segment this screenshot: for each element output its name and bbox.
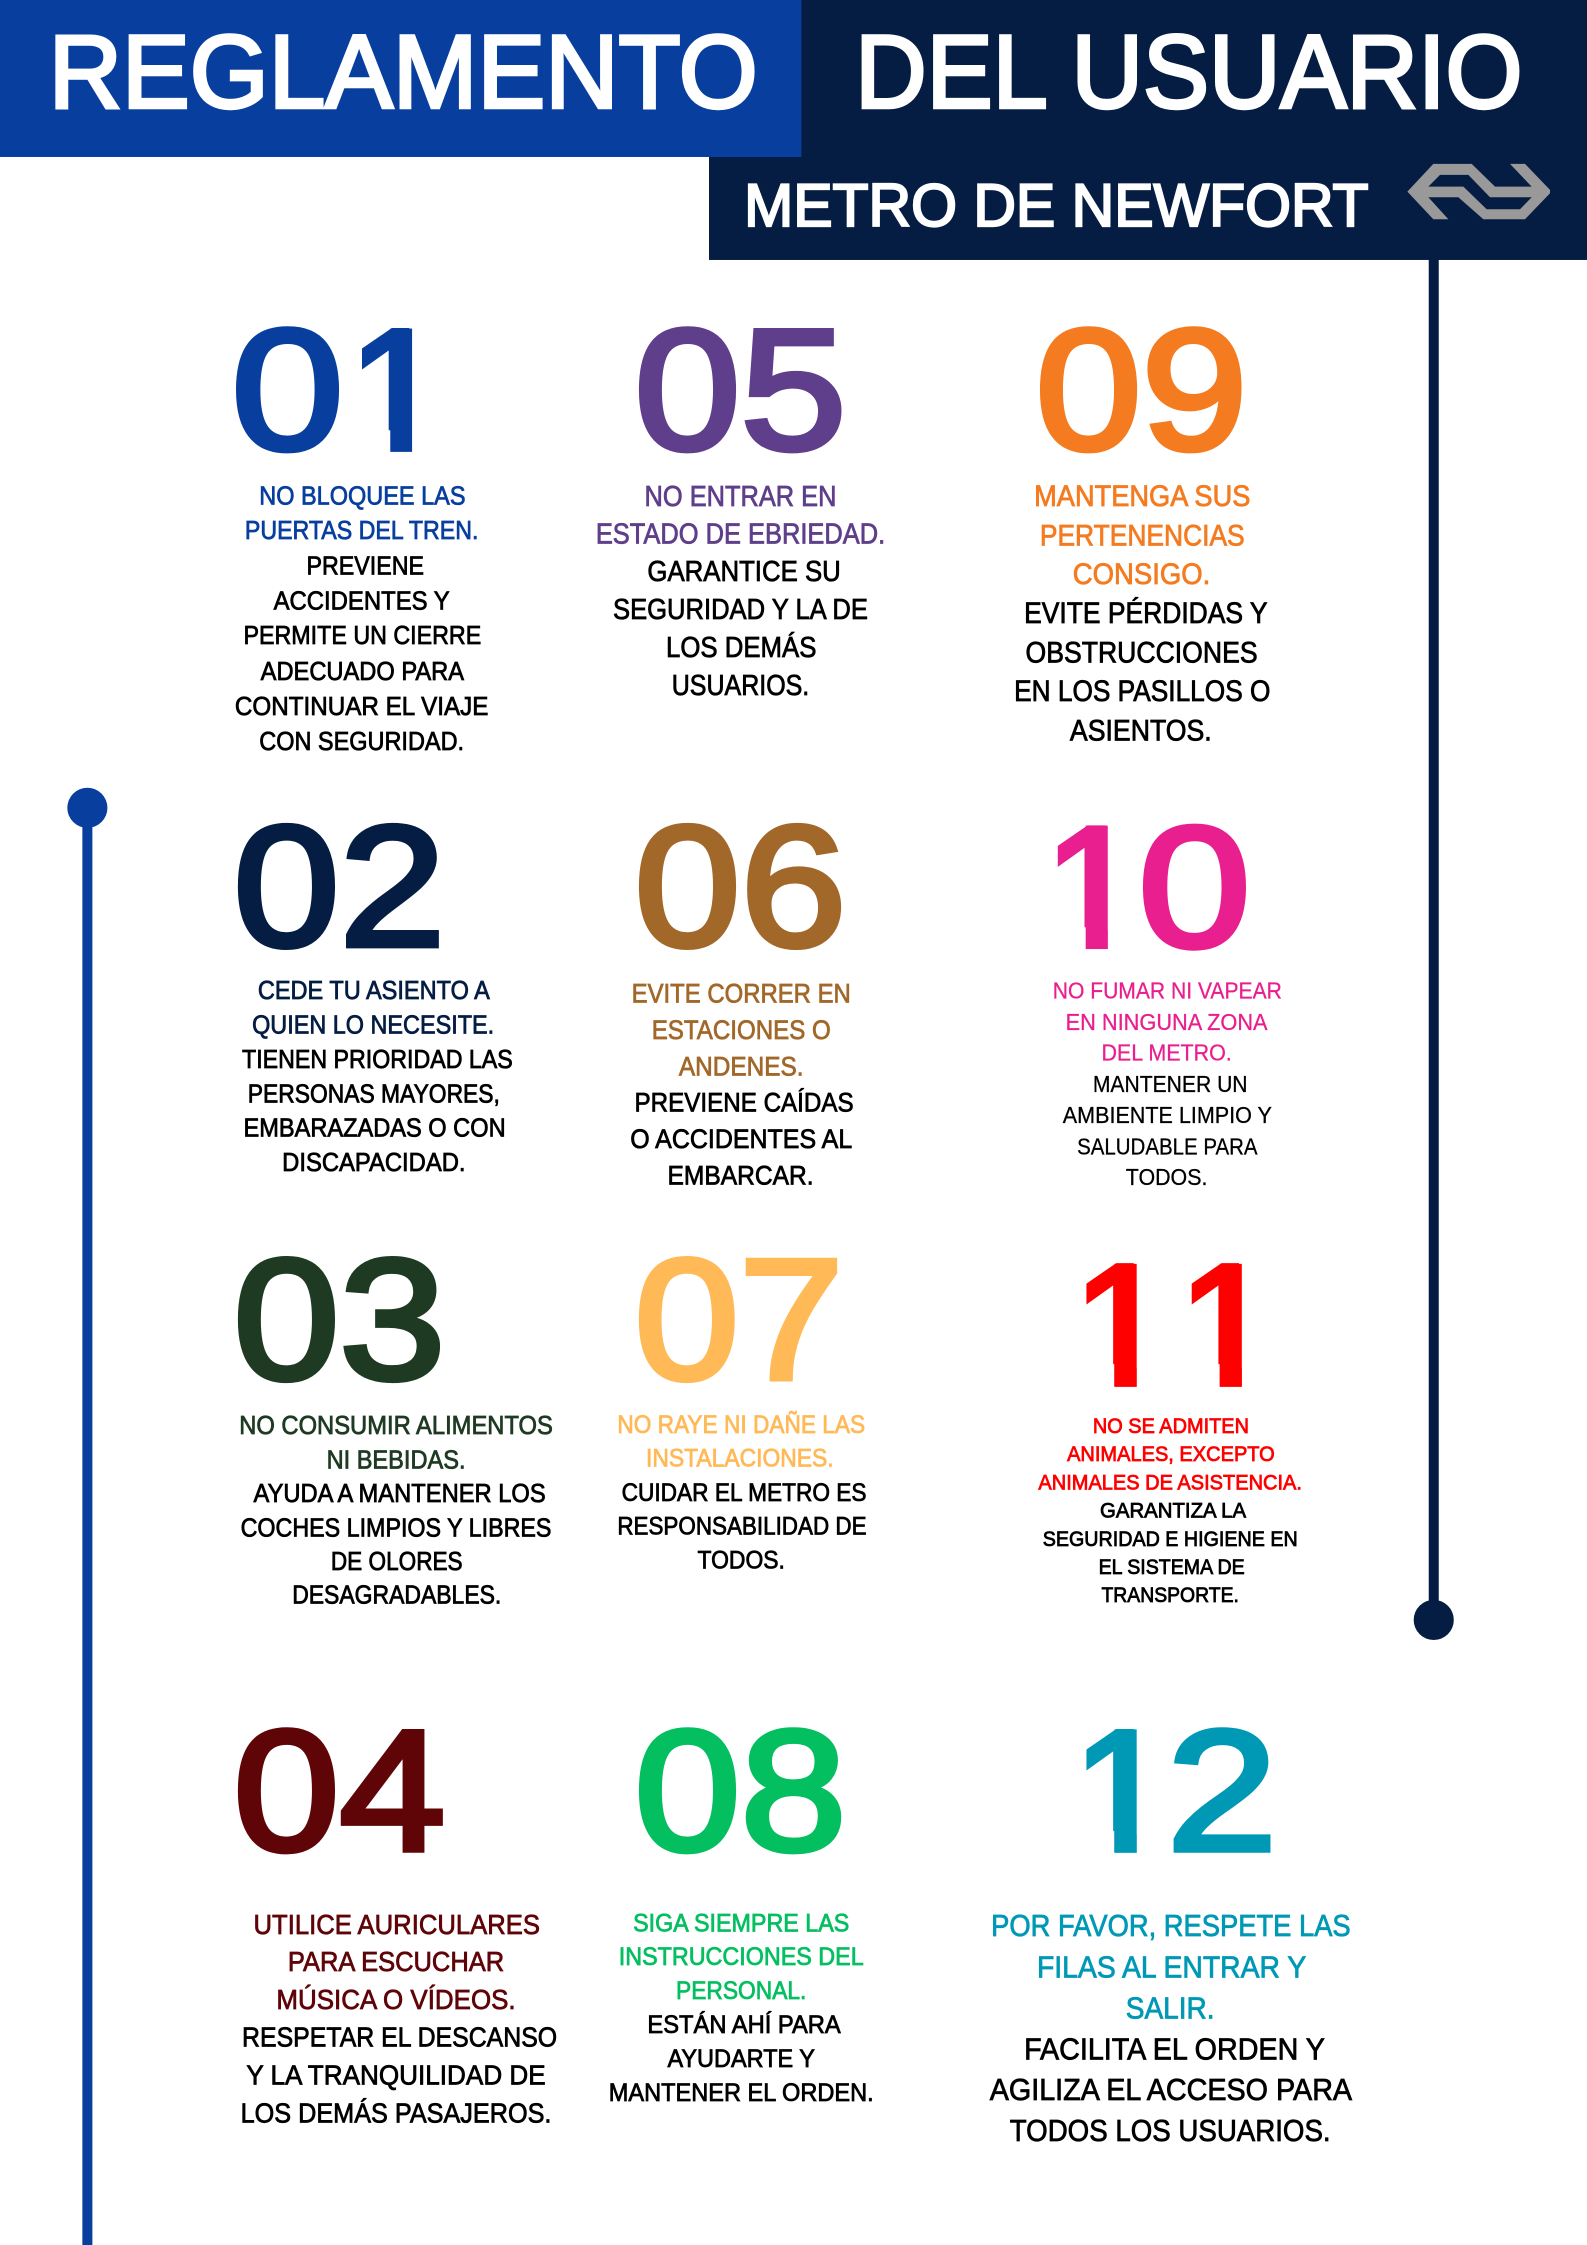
number 05: 05	[635, 294, 846, 486]
rule 06	[630, 791, 854, 1190]
rule 01 text: CON SEGURIDAD.	[259, 726, 464, 756]
rule 04 text: UTILICE AURICULARES	[254, 1908, 540, 1940]
rule 08 text: PERSONAL.	[676, 1977, 806, 2005]
rule 11	[1038, 1229, 1302, 1607]
number 10	[1038, 791, 1251, 983]
number 12	[1067, 1695, 1277, 1887]
rule 03 text: NI BEBIDAS.	[327, 1446, 466, 1474]
rule 02	[233, 791, 513, 1177]
rule 01 text: ADECUADO PARA	[261, 656, 465, 686]
rule 10 text: AMBIENTE LIMPIO Y	[1063, 1102, 1272, 1128]
rule 08 text	[609, 1909, 874, 2107]
rule 01 text: NO BLOQUEE LAS	[259, 481, 466, 511]
number 06: 06	[635, 791, 846, 983]
rule 12 text	[990, 1908, 1353, 2148]
rule 10 text	[1053, 977, 1282, 1190]
rule 01	[231, 294, 488, 756]
rule 08 text: INSTRUCCIONES DEL	[619, 1943, 864, 1971]
number 10: 1	[1044, 791, 1140, 983]
rule 12 text: POR FAVOR, RESPETE LAS	[991, 1908, 1351, 1943]
header	[0, 0, 1587, 260]
rule 07 text: NO RAYE NI DAÑE LAS	[617, 1410, 865, 1439]
rule 12 text: FACILITA EL ORDEN Y	[1024, 2031, 1325, 2066]
rule 07 text: CUIDAR EL METRO ES	[622, 1479, 867, 1507]
rule 12 text: TODOS LOS USUARIOS.	[1010, 2113, 1331, 2148]
rule 09 text: OBSTRUCCIONES	[1026, 637, 1258, 669]
rule 11 text: ANIMALES, EXCEPTO	[1067, 1443, 1275, 1466]
number 09: 09	[1036, 294, 1248, 486]
rule 02 text: DISCAPACIDAD.	[282, 1149, 466, 1177]
rule 05 text: SEGURIDAD Y LA DE	[613, 594, 868, 626]
number 11: 1	[1073, 1229, 1168, 1421]
rule 07 text: TODOS.	[698, 1546, 785, 1574]
rule 06 text: EMBARCAR.	[667, 1159, 814, 1190]
rule 09 text: CONSIGO.	[1073, 559, 1210, 591]
number 02: 02	[233, 791, 445, 983]
number 01: 0	[231, 294, 344, 486]
left timeline	[67, 788, 107, 2245]
rule 08 text: AYUDARTE Y	[667, 2045, 815, 2073]
rule 01 text: CONTINUAR EL VIAJE	[235, 691, 488, 721]
right timeline	[1414, 259, 1454, 1640]
rule 10	[1038, 791, 1282, 1190]
rule 07 text	[617, 1410, 867, 1574]
rule 02 text: CEDE TU ASIENTO A	[258, 977, 491, 1005]
number 01	[231, 294, 444, 486]
rule 11 text: TRANSPORTE.	[1101, 1584, 1239, 1607]
rule 09 text: EN LOS PASILLOS O	[1014, 676, 1270, 708]
rule 02 text: PERSONAS MAYORES,	[248, 1080, 500, 1108]
rule 11 text: NO SE ADMITEN	[1093, 1415, 1249, 1438]
rule 07 text: INSTALACIONES.	[646, 1445, 834, 1473]
rule 03 text: DESAGRADABLES.	[292, 1582, 501, 1610]
rule 10 text: DEL METRO.	[1101, 1040, 1232, 1066]
number 07: 07	[635, 1224, 844, 1416]
rule 12 text: SALIR.	[1126, 1991, 1215, 2026]
rule 07	[617, 1224, 867, 1574]
rule 11 text: ANIMALES DE ASISTENCIA.	[1038, 1472, 1302, 1495]
rule 04 text: LOS DEMÁS PASAJEROS.	[241, 2096, 551, 2128]
rule 05 text: ESTADO DE EBRIEDAD.	[596, 518, 885, 550]
rule 03 text: AYUDA A MANTENER LOS	[254, 1480, 546, 1508]
rule 11 text: GARANTIZA LA	[1100, 1500, 1247, 1523]
rule 03 text: DE OLORES	[331, 1548, 463, 1576]
rule 04 text: Y LA TRANQUILIDAD DE	[246, 2058, 546, 2090]
rule 04 text	[241, 1908, 557, 2128]
rule 10 text: NO FUMAR NI VAPEAR	[1053, 977, 1282, 1003]
rule 05 text: GARANTICE SU	[647, 556, 841, 588]
rule 11 text	[1038, 1415, 1302, 1607]
rule 03	[233, 1224, 553, 1610]
number 12: 2	[1167, 1695, 1277, 1887]
rule 12 text: FILAS AL ENTRAR Y	[1037, 1950, 1306, 1985]
rule 10 text: TODOS.	[1126, 1164, 1207, 1190]
rule 11 text: EL SISTEMA DE	[1099, 1556, 1245, 1579]
rule 07 text: RESPONSABILIDAD DE	[617, 1513, 867, 1541]
rule 05 text: LOS DEMÁS	[666, 631, 816, 664]
subtitle: METRO DE NEWFORT	[744, 172, 1369, 239]
rule 02 text	[242, 977, 513, 1177]
rule 05 text: NO ENTRAR EN	[645, 481, 836, 513]
title: del usuario: DEL USUARIO	[855, 14, 1523, 130]
rule 10 text: SALUDABLE PARA	[1077, 1133, 1258, 1159]
number 11	[1067, 1229, 1274, 1421]
rule 06 text: ESTACIONES O	[652, 1014, 831, 1045]
rule 06 text: EVITE CORRER EN	[632, 977, 851, 1008]
rule 09 text: MANTENGA SUS	[1034, 481, 1250, 513]
rule 09 text: PERTENENCIAS	[1040, 521, 1245, 553]
rule 01 text: PREVIENE	[307, 551, 424, 581]
rule 10 text: EN NINGUNA ZONA	[1066, 1009, 1268, 1035]
number 12: 1	[1073, 1695, 1168, 1887]
rule 02 text: EMBARAZADAS O CON	[243, 1115, 506, 1143]
rule 04 text: MÚSICA O VÍDEOS.	[276, 1983, 516, 2015]
rule 06 text: PREVIENE CAÍDAS	[635, 1086, 854, 1117]
title: reglamento: REGLAMENTO	[49, 14, 758, 130]
rule 05 text: USUARIOS.	[672, 670, 809, 702]
rule 09 text	[1014, 481, 1270, 747]
rule 09	[1014, 294, 1270, 747]
rule 09 text: ASIENTOS.	[1070, 715, 1212, 747]
rule 03 text: COCHES LIMPIOS Y LIBRES	[241, 1514, 551, 1542]
rule 10 text: MANTENER UN	[1093, 1071, 1248, 1097]
rules grid	[231, 294, 1353, 2148]
rule 08 text: SIGA SIEMPRE LAS	[633, 1909, 849, 1937]
number 08: 08	[635, 1695, 846, 1887]
rule 02 text: TIENEN PRIORIDAD LAS	[242, 1046, 513, 1074]
rule 08	[609, 1695, 874, 2107]
number 10: 0	[1138, 791, 1251, 983]
rule 08 text: MANTENER EL ORDEN.	[609, 2079, 874, 2107]
rule 02 text: QUIEN LO NECESITE.	[252, 1012, 494, 1040]
rule 04	[233, 1695, 557, 2128]
rule 04 text: RESPETAR EL DESCANSO	[242, 2020, 557, 2052]
number 01: 1	[348, 294, 444, 486]
rule 09 text: EVITE PÉRDIDAS Y	[1024, 597, 1268, 630]
rule 11 text: SEGURIDAD E HIGIENE EN	[1043, 1528, 1298, 1551]
number 03: 03	[233, 1224, 445, 1416]
rule 05	[596, 294, 885, 702]
rule 01 text: PERMITE UN CIERRE	[243, 620, 481, 650]
rule 06 text: O ACCIDENTES AL	[630, 1123, 852, 1154]
rule 01 text: ACCIDENTES Y	[274, 586, 450, 616]
rule 03 text: NO CONSUMIR ALIMENTOS	[239, 1412, 553, 1440]
rule 01 text: PUERTAS DEL TREN.	[245, 515, 478, 545]
number 04: 04	[233, 1695, 445, 1887]
rule 01 text	[235, 481, 488, 756]
rule 06 text	[630, 977, 854, 1190]
rule 12 text: AGILIZA EL ACCESO PARA	[990, 2072, 1353, 2107]
rule 04 text: PARA ESCUCHAR	[288, 1945, 504, 1977]
rule 08 text: ESTÁN AHÍ PARA	[647, 2010, 841, 2039]
rule 12	[990, 1695, 1353, 2148]
rule 05 text	[596, 481, 885, 702]
icon: metro logo	[1407, 164, 1550, 219]
number 11: 1	[1178, 1229, 1274, 1421]
rule 06 text: ANDENES.	[679, 1051, 804, 1082]
rule 03 text	[239, 1412, 553, 1610]
